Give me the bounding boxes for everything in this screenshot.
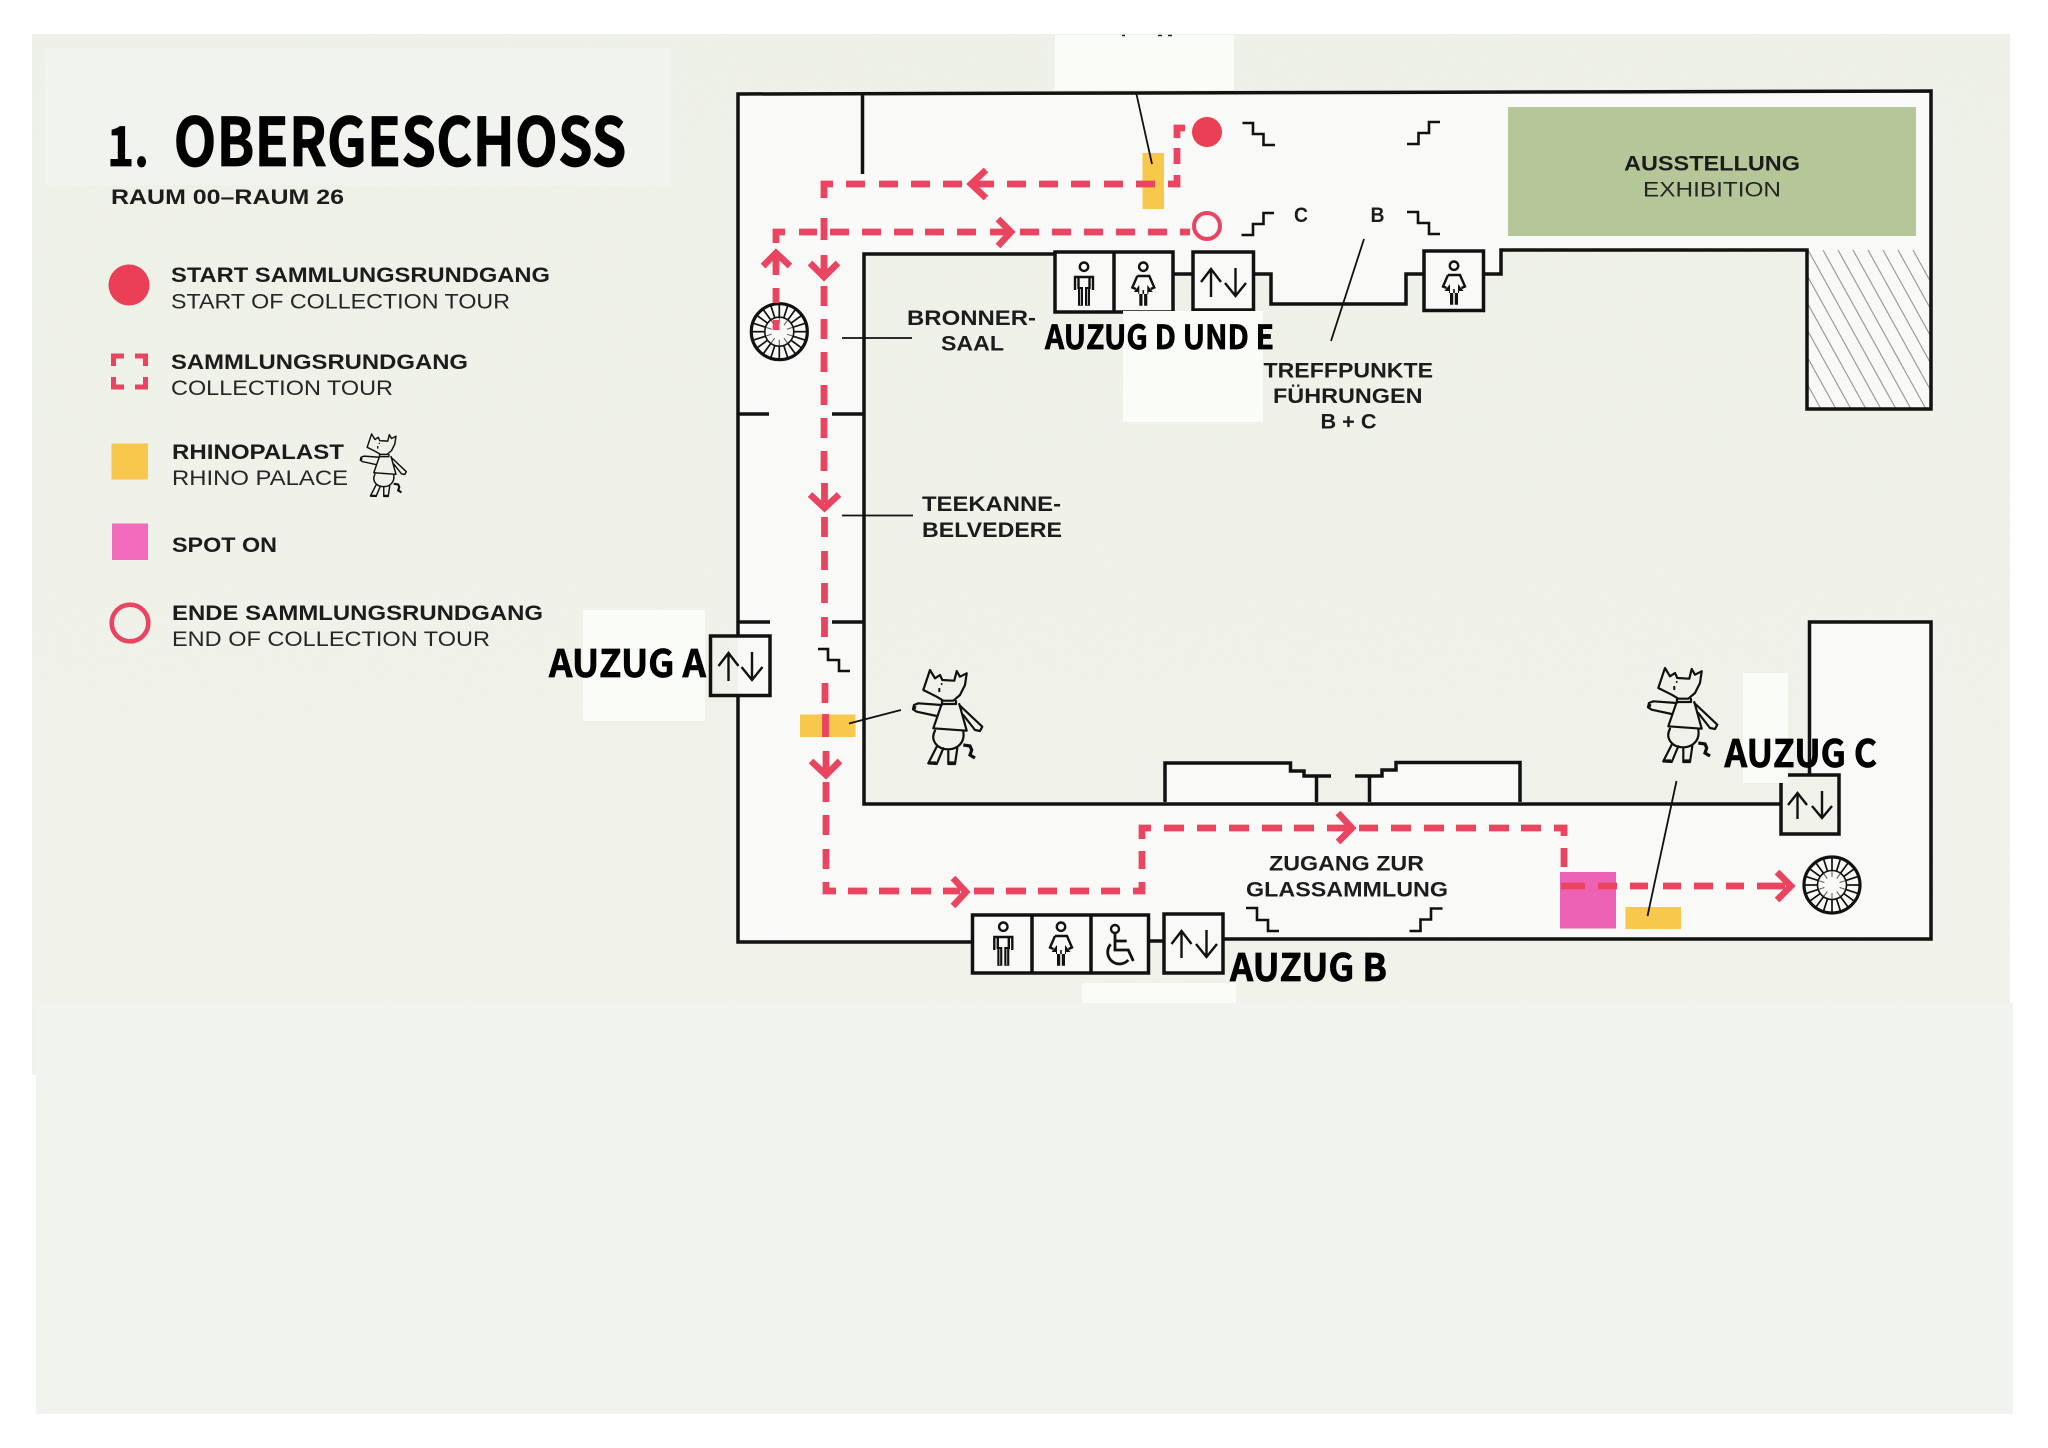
- label: Zugang zur Glassammlung: ZUGANG ZUR: [1269, 852, 1425, 876]
- top text remnants: [1122, 34, 1172, 36]
- legend: end marker: ENDE SAMMLUNGSRUNDGANG: [172, 601, 543, 625]
- rhino palace top: [1142, 153, 1164, 209]
- label: elevators D and E: AUZUG D UND E: [1044, 311, 1274, 359]
- legend: end marker: END OF COLLECTION TOUR: [172, 627, 490, 651]
- label: Treffpunkte Führungen: B + C: [1320, 410, 1376, 434]
- label: Bronner-Saal: [907, 306, 1036, 356]
- label: Treffpunkte Führungen: [1264, 358, 1433, 434]
- legend: collection tour: [114, 350, 468, 400]
- title patch: [45, 48, 671, 185]
- blank lower panel: [36, 1003, 2013, 1414]
- title: OBERGESCHOSS: [174, 89, 626, 186]
- elevator D/E: [1193, 252, 1254, 310]
- legend: spot on: [112, 524, 277, 560]
- stairs: [818, 122, 1442, 931]
- legend: end marker: [112, 601, 543, 651]
- collection tour route: [763, 128, 1791, 906]
- rhino palace left: [800, 714, 856, 737]
- restrooms bottom: [972, 915, 1148, 973]
- legend: start marker: [108, 263, 550, 314]
- end marker: [1194, 213, 1220, 239]
- legend: collection tour: SAMMLUNGSRUNDGANG: [171, 350, 468, 374]
- label: elevator B: AUZUG B: [1229, 937, 1387, 992]
- elevator A: [710, 636, 770, 696]
- spiral staircase left: [751, 304, 807, 360]
- restroom top right: [1424, 251, 1484, 310]
- rhino palace right: [1626, 907, 1681, 929]
- spot on room: [1560, 872, 1616, 928]
- subtitle: RAUM 00–RAUM 26: [111, 185, 344, 209]
- exhibition room: AUSSTELLUNG: [1624, 152, 1800, 176]
- exhibition room: EXHIBITION: [1643, 178, 1781, 202]
- legend: start marker: START OF COLLECTION TOUR: [171, 290, 510, 314]
- label: elevator C: AUZUG C: [1724, 723, 1877, 778]
- exhibition room: [1508, 107, 1916, 236]
- label: elevator A: AUZUG A: [548, 633, 707, 688]
- legend: rhino palace: [112, 434, 406, 496]
- paper background: [32, 34, 2010, 1075]
- route arrows: [763, 170, 1791, 906]
- hatched area: [1808, 250, 1930, 408]
- white patches: [583, 35, 1788, 1003]
- floor area: [738, 91, 1931, 974]
- legend: collection tour: COLLECTION TOUR: [171, 376, 393, 400]
- label: Teekanne-Belvedere: [922, 492, 1062, 542]
- legend: [108, 263, 550, 651]
- label: Treffpunkte Führungen: TREFFPUNKTE: [1264, 358, 1433, 382]
- leader lines: [842, 92, 1676, 916]
- elevator B: [1164, 914, 1223, 973]
- restrooms top: [1055, 252, 1173, 312]
- elevator C: [1781, 775, 1839, 834]
- spiral staircase right: [1804, 857, 1860, 913]
- title block: [107, 89, 626, 209]
- floor plan: [710, 91, 2001, 974]
- label: Bronner-Saal: SAAL: [941, 332, 1004, 356]
- legend: rhino palace: RHINOPALAST: [172, 440, 344, 464]
- start marker: [1192, 117, 1222, 147]
- rhino right: [1648, 668, 1717, 762]
- legend: start marker: START SAMMLUNGSRUNDGANG: [171, 263, 550, 287]
- label: Zugang zur Glassammlung: [1246, 852, 1448, 902]
- legend: spot on: SPOT ON: [172, 533, 277, 557]
- label: Zugang zur Glassammlung: GLASSAMMLUNG: [1246, 878, 1448, 902]
- label: Teekanne-Belvedere: TEEKANNE-: [922, 492, 1061, 516]
- legend: rhino palace: RHINO PALACE: [172, 466, 348, 490]
- meeting point labels B and C: [1294, 203, 1384, 227]
- label: Treffpunkte Führungen: FÜHRUNGEN: [1273, 383, 1422, 408]
- title number: 1.: [107, 102, 149, 182]
- meeting point labels B and C: B: [1370, 203, 1384, 227]
- paper texture: [32, 34, 2010, 1075]
- meeting point labels B and C: C: [1294, 203, 1308, 227]
- label: Teekanne-Belvedere: BELVEDERE: [922, 518, 1062, 542]
- label: Bronner-Saal: BRONNER-: [907, 306, 1036, 330]
- walls: [738, 91, 1931, 942]
- rhino left: [913, 670, 982, 764]
